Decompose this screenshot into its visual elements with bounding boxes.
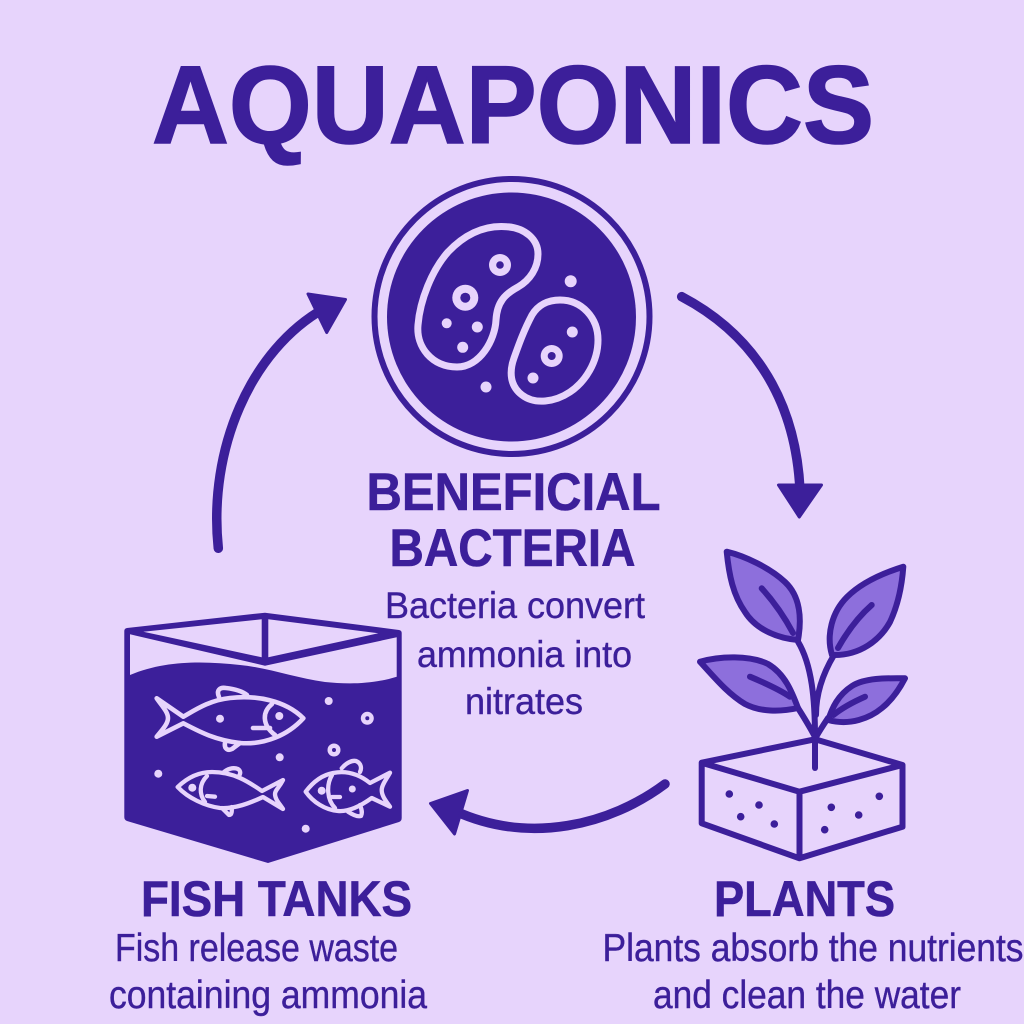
text: bacteria description (385, 585, 646, 722)
bacterium: small cell (511, 300, 598, 401)
leaf: upper left (727, 552, 800, 640)
text: plants description: and clean the water (653, 974, 961, 1017)
arrow: plants to fish tanks (430, 784, 665, 834)
leaf: lower right (828, 678, 905, 722)
sponge cube (702, 739, 902, 858)
leaf: upper right (830, 567, 903, 655)
text: fish tanks description: Fish release waste (115, 927, 398, 970)
text: bacteria description: Bacteria convert (385, 585, 646, 626)
icon: plant (700, 552, 905, 858)
heading: beneficial: BENEFICIAL (366, 463, 660, 522)
leaf: lower left (700, 657, 798, 711)
bacterium: large cell (418, 226, 538, 367)
icon: bacteria circle (374, 179, 650, 454)
fish 3 (306, 761, 390, 816)
heading: fish tanks: FISH TANKS (141, 871, 412, 927)
text: bacteria description: nitrates (465, 681, 583, 722)
arrow: fish tanks to bacteria (217, 294, 346, 548)
nuclei and dots (442, 254, 578, 392)
arrow: bacteria to plants (682, 297, 822, 517)
text: fish tanks description: containing ammonia (109, 974, 427, 1017)
root stem (812, 738, 818, 768)
heading: bacteria: BACTERIA (390, 519, 636, 578)
plant stems (798, 642, 834, 738)
icon: fish tank (124, 613, 402, 863)
fish 1 (157, 688, 303, 750)
fish 2 (178, 768, 283, 815)
bubbles (154, 697, 374, 833)
heading: plants: PLANTS (714, 871, 895, 927)
text: bacteria description: ammonia into (417, 634, 632, 675)
tank water surface (130, 634, 397, 683)
leaf veins (750, 588, 872, 715)
text: fish tanks description (109, 927, 427, 1017)
sponge dots (726, 790, 883, 834)
title: AQUAPONICS (152, 44, 874, 167)
text: plants description (602, 927, 1024, 1017)
